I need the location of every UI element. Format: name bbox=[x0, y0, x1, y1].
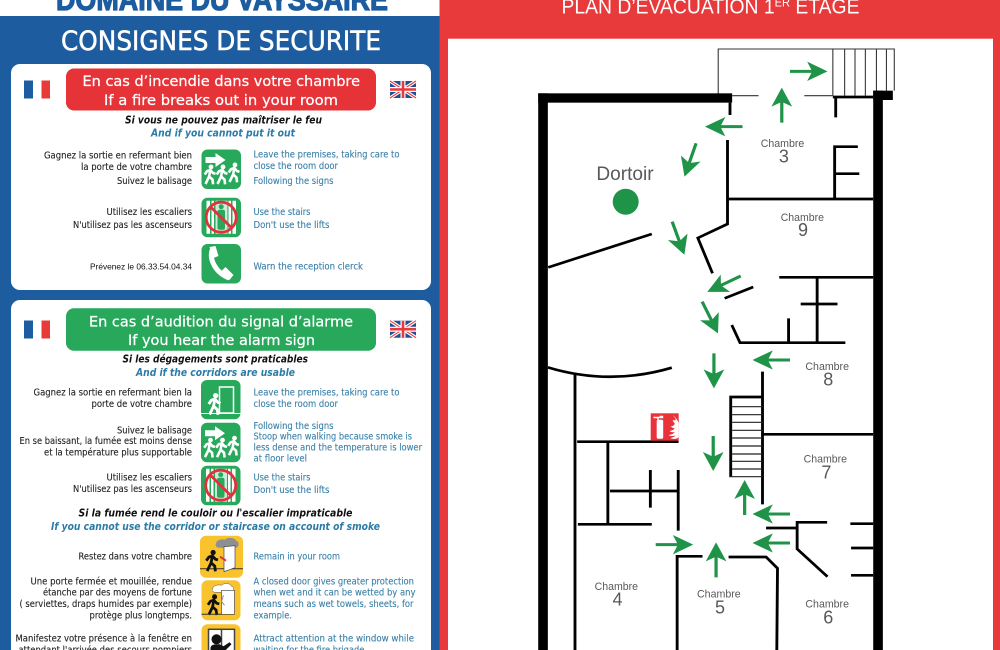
icon: exit door bbox=[201, 380, 240, 419]
label: chambre 9: 9 bbox=[798, 220, 808, 240]
label: chambre 5: 5 bbox=[715, 598, 725, 618]
left panel right edge strip bbox=[431, 16, 440, 650]
text: wet door French: étanche par des moyens de fortune bbox=[43, 588, 192, 599]
arrow: down corridor bbox=[704, 353, 724, 388]
text: remain English: Remain in your room bbox=[254, 551, 340, 562]
subheading: cannot put it out: Si vous ne pouvez pas maîtriser le feu bbox=[125, 113, 322, 126]
arrow: down-left bbox=[675, 140, 706, 180]
arrow: from room 8 bbox=[752, 350, 790, 370]
text: stairs French: N'utilisez pas les ascenseurs bbox=[73, 484, 192, 495]
label: chambre 4 bbox=[595, 581, 638, 610]
arrow: down beside stairs bbox=[703, 436, 724, 471]
banner: alarm: If you hear the alarm sign bbox=[128, 333, 315, 349]
heading: consignes de securite: CONSIGNES DE SECURITE bbox=[61, 26, 381, 57]
text: wet door English: when wet and it can be wetted by any bbox=[254, 588, 416, 599]
label: chambre 7: Chambre bbox=[804, 454, 847, 466]
icon: exit runners bbox=[202, 150, 241, 189]
text: stoop French: et la température plus supportable bbox=[44, 447, 192, 458]
text: stairs French bbox=[73, 207, 192, 231]
arrow: up to stairs bbox=[734, 480, 755, 515]
text: stairs English bbox=[254, 473, 330, 496]
banner: fire: If a fire breaks out in your room bbox=[104, 93, 338, 109]
label: chambre 5 bbox=[697, 589, 741, 618]
text: stairs English: Don't use the lifts bbox=[254, 220, 330, 231]
text: wet door English: example. bbox=[254, 610, 292, 621]
arrow: from room 4 bbox=[656, 535, 693, 554]
text: wet door English: means such as wet towels, sheets, for bbox=[254, 599, 414, 610]
subheading: cannot put it out: And if you cannot put it out bbox=[150, 127, 296, 140]
text: phone number: Prévenez le 06.33.54.04.34 bbox=[90, 262, 192, 272]
text: stairs French: Utilisez les escaliers bbox=[106, 473, 192, 484]
icon: no lift bbox=[201, 466, 240, 505]
text: leave instructions English: Following the signs bbox=[254, 176, 334, 187]
icon: fire extinguisher sign bbox=[651, 413, 679, 441]
panel: floor plan white area bbox=[448, 39, 993, 650]
label: chambre 7 bbox=[804, 454, 847, 483]
panel: alarm bbox=[11, 300, 431, 650]
text: stoop English: at floor level bbox=[254, 454, 307, 465]
flag: France bbox=[24, 80, 50, 98]
text: leave instructions English: close the room door bbox=[254, 161, 338, 172]
subheading: smoke blocks corridor: If you cannot use the corridor or staircase on account of smoke bbox=[51, 520, 380, 533]
panel: evacuation plan background bbox=[440, 0, 1000, 650]
text: warn reception: Warn the reception clerck bbox=[254, 262, 363, 272]
icon: no lift bbox=[202, 198, 241, 237]
subheading: cannot put it out bbox=[125, 113, 322, 140]
floor plan: lower walls bbox=[548, 325, 873, 650]
flag: United Kingdom bbox=[390, 321, 416, 338]
arrow: from room 6 bbox=[752, 533, 790, 553]
text: leave instructions French: la porte de votre chambre bbox=[81, 162, 192, 173]
text: stoop English: Stoop when walking because smoke is bbox=[254, 431, 412, 442]
flag: United Kingdom bbox=[390, 81, 416, 98]
floor plan: upper walls bbox=[538, 49, 894, 650]
banner: alarm bbox=[66, 308, 376, 351]
arrow: from room 5 bbox=[706, 542, 726, 577]
text: window French: Manifestez votre présence à la fenêtre en bbox=[16, 634, 192, 645]
label: chambre 9: Chambre bbox=[781, 212, 824, 224]
page background: top white band bbox=[0, 0, 440, 16]
subheading: smoke blocks corridor: Si la fumée rend le couloir ou l'escalier impraticable bbox=[78, 507, 353, 520]
text: stoop French bbox=[20, 425, 192, 458]
arrow: from room 7 bbox=[752, 504, 790, 524]
text: stairs English bbox=[254, 207, 330, 231]
arrows: evacuation route, upper bbox=[662, 62, 827, 337]
text: leave instructions English bbox=[254, 150, 400, 187]
text: stairs English: Don't use the lifts bbox=[254, 485, 330, 496]
label: chambre 8: 8 bbox=[823, 370, 833, 390]
label: chambre 4: Chambre bbox=[595, 581, 638, 593]
subheading: corridors usable: And if the corridors are usable bbox=[135, 366, 295, 379]
label: chambre 6: Chambre bbox=[805, 599, 849, 611]
label: chambre 8 bbox=[805, 361, 849, 390]
label: chambre 3: Chambre bbox=[761, 138, 804, 150]
subheading: corridors usable: Si les dégagements sont praticables bbox=[122, 353, 308, 366]
icon: remain in room bbox=[200, 536, 243, 578]
text: stairs French: N'utilisez pas les ascenseurs bbox=[73, 220, 192, 231]
label: chambre 3 bbox=[761, 138, 804, 166]
banner: alarm: En cas d’audition du signal d’alarme bbox=[89, 315, 353, 331]
text: window French bbox=[16, 634, 192, 650]
text: stairs English: Use the stairs bbox=[254, 473, 311, 484]
text: window English bbox=[254, 634, 414, 650]
text: leave French: Gagnez la sortie en refermant bien la bbox=[34, 388, 192, 399]
text: stoop English bbox=[254, 421, 422, 465]
label: dortoir: Dortoir bbox=[596, 164, 654, 185]
flag: France bbox=[24, 320, 50, 338]
text: leave French: porte de votre chambre bbox=[92, 399, 192, 410]
label: chambre 6: 6 bbox=[823, 607, 833, 627]
text: stoop French: Suivez le balisage bbox=[117, 425, 192, 436]
panel: safety instructions background bbox=[0, 16, 440, 650]
arrow: left bbox=[705, 117, 742, 136]
text: wet door French: ( serviettes, draps humides par exemple) bbox=[20, 599, 192, 610]
text: leave instructions French: Gagnez la sortie en refermant bien bbox=[44, 151, 192, 162]
arrow: up bbox=[771, 88, 792, 123]
label: chambre 3: 3 bbox=[779, 146, 789, 166]
text: leave French bbox=[34, 388, 192, 410]
label: chambre 6 bbox=[805, 599, 849, 627]
icon: wet door bbox=[202, 580, 240, 620]
text: wet door French: Une porte fermée et mouillée, rendue bbox=[30, 577, 192, 588]
arrow: to outside stairs bbox=[790, 62, 827, 81]
label: chambre 5: Chambre bbox=[697, 589, 741, 601]
text: stairs French bbox=[73, 473, 192, 495]
text: wet door English bbox=[254, 577, 416, 621]
arrow: lower-left bbox=[703, 267, 745, 300]
text: wet door French bbox=[20, 577, 192, 621]
text: remain French: Restez dans votre chambre bbox=[78, 551, 192, 562]
text: leave instructions English: Leave the premises, taking care to bbox=[254, 150, 400, 161]
text: leave instructions French bbox=[44, 151, 192, 187]
text: leave English bbox=[254, 388, 400, 410]
text: wet door English: A closed door gives greater protection bbox=[254, 577, 414, 588]
icon: exit runners bbox=[201, 423, 240, 462]
panel: fire in your room bbox=[11, 64, 431, 290]
text: wet door French: protège plus longtemps. bbox=[90, 610, 192, 621]
arrows: evacuation route, lower bbox=[656, 350, 790, 577]
icon: window bbox=[202, 624, 240, 650]
subheading: smoke blocks corridor bbox=[51, 507, 380, 533]
banner: fire bbox=[66, 68, 376, 110]
text: stoop French: En se baissant, la fumée est moins dense bbox=[20, 436, 192, 447]
marker: assembly point bbox=[613, 189, 639, 215]
text: leave English: Leave the premises, taking care to bbox=[254, 388, 400, 399]
text: stairs English: Use the stairs bbox=[254, 207, 311, 218]
label: chambre 4: 4 bbox=[612, 590, 623, 610]
arrow: down-right bbox=[662, 219, 694, 258]
text: stoop English: Following the signs bbox=[254, 421, 334, 432]
subheading: corridors usable bbox=[122, 353, 308, 379]
text: leave English: close the room door bbox=[254, 399, 338, 410]
label: chambre 7: 7 bbox=[821, 463, 831, 483]
text: stairs French: Utilisez les escaliers bbox=[106, 207, 192, 218]
banner: fire: En cas d’incendie dans votre chambre bbox=[82, 74, 360, 90]
label: chambre 8: Chambre bbox=[805, 361, 849, 373]
arrow: down-right corridor bbox=[693, 298, 727, 337]
label: chambre 9 bbox=[781, 212, 824, 240]
text: window English: Attract attention at the window while bbox=[254, 634, 414, 645]
text: leave instructions French: Suivez le balisage bbox=[117, 176, 192, 187]
text: stoop English: less dense and the temperature is lower bbox=[254, 442, 422, 453]
icon: telephone bbox=[202, 244, 241, 284]
